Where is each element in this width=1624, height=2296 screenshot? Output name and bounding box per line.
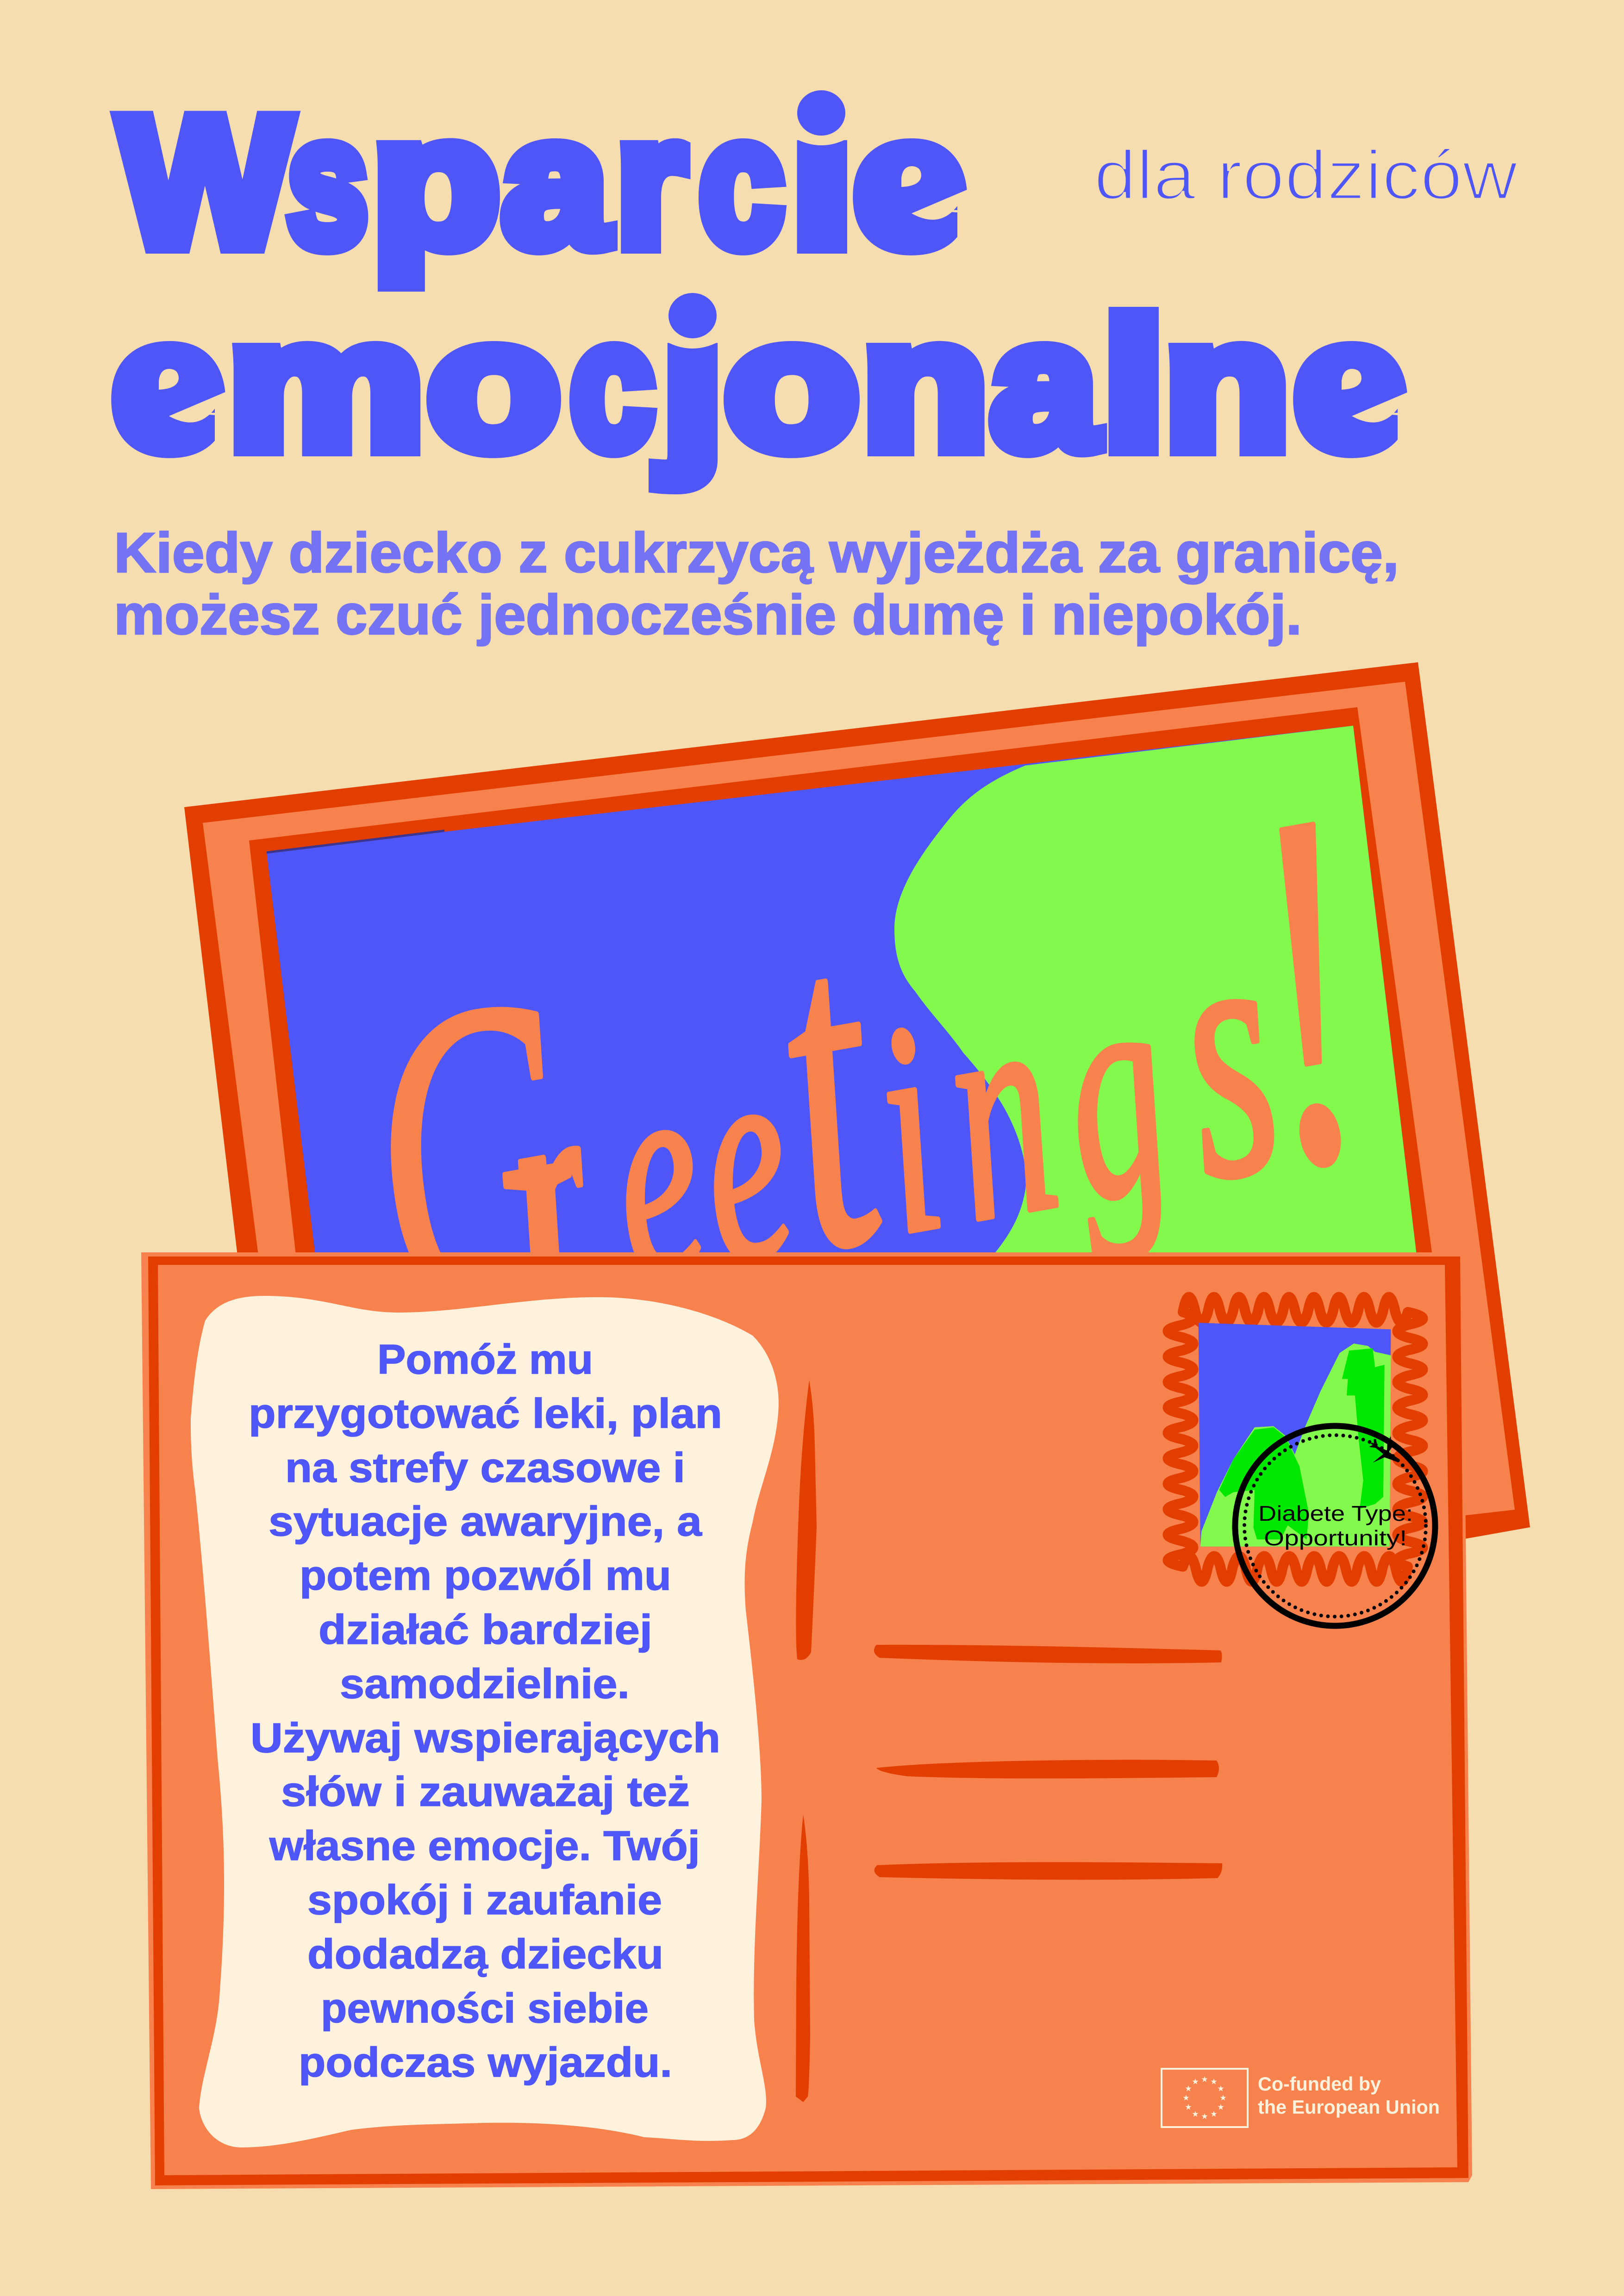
hand lettering: Greetings!: n	[923, 931, 1077, 1287]
postmark: Diabete Type: Opportunity!: Diabete Type:	[1258, 1501, 1413, 1525]
hand lettering: Greetings!: g	[1036, 911, 1191, 1267]
title: n	[862, 282, 988, 487]
title: a	[991, 282, 1099, 487]
body text: słów i zauważaj też	[281, 1769, 690, 1815]
body text: przygotować leki, plan	[249, 1391, 722, 1437]
icon: EU stars	[1183, 2076, 1226, 2119]
logo: EU co-funded: Co-funded by	[1258, 2073, 1381, 2095]
title: e	[1294, 282, 1405, 487]
subheading: dla rodziców: dla rodziców	[1094, 136, 1518, 214]
picture: sky and hill	[267, 726, 1417, 1259]
postmark: Diabete Type: Opportunity!: Opportunity!	[1264, 1526, 1407, 1550]
hand lettering: Greetings!: G	[335, 901, 613, 1414]
intro text: możesz czuć jednocześnie dumę i niepokój.	[114, 583, 1302, 646]
icon: airplane	[1369, 1436, 1399, 1463]
body text: na strefy czasowe i	[285, 1445, 685, 1491]
title: e	[112, 282, 224, 487]
address lines	[874, 1645, 1222, 1880]
body text: spokój i zaufanie	[307, 1877, 662, 1923]
title: r	[617, 80, 685, 284]
body text: pewności siebie	[321, 1985, 649, 2032]
hand lettering: Greetings!	[325, 705, 1404, 1428]
body text: działać bardziej	[319, 1607, 652, 1653]
body text: potem pozwól mu	[300, 1553, 671, 1599]
title: s	[287, 80, 368, 284]
hand lettering: Greetings!: e	[675, 991, 812, 1328]
title: l	[1103, 282, 1164, 487]
title: n	[1165, 282, 1289, 487]
body text: własne emocje. Twój	[269, 1823, 700, 1869]
hand lettering: Greetings!: !	[1204, 705, 1404, 1273]
front postcard	[141, 1252, 1472, 2189]
body text: podczas wyjazdu.	[299, 2040, 672, 2086]
title: p	[373, 80, 499, 286]
intro text	[114, 521, 1399, 646]
body text: Pomóż mu	[377, 1337, 593, 1383]
logo: EU co-funded: the European Union	[1258, 2096, 1440, 2118]
stamp border	[1168, 1297, 1423, 1582]
title	[112, 80, 1412, 488]
title: j	[659, 282, 723, 488]
back postcard	[184, 662, 1530, 1685]
postage stamp	[1168, 1297, 1423, 1582]
hand lettering: Greetings!: s	[1149, 848, 1304, 1256]
hand lettering: Greetings!: t	[740, 827, 918, 1347]
title: m	[228, 282, 424, 487]
body text: sytuacje awaryjne, a	[269, 1499, 702, 1545]
title: i	[792, 80, 853, 284]
body text: dodadzą dziecku	[307, 1931, 663, 1978]
text panel: cream blob	[191, 1296, 779, 2147]
intro text: Kiedy dziecko z cukrzycą wyjeżdża za granicę,	[114, 521, 1399, 584]
postmark: Diabete Type: Opportunity!	[1235, 1426, 1435, 1626]
hand lettering: Greetings!: e	[587, 1007, 725, 1344]
logo: EU co-funded	[1162, 2069, 1440, 2127]
hand lettering: Greetings!: i	[853, 960, 962, 1297]
title: a	[503, 80, 609, 284]
title: o	[725, 282, 858, 487]
title: o	[428, 282, 560, 487]
title: e	[854, 80, 965, 284]
postcard divider lines	[796, 1380, 817, 2102]
title: c	[700, 80, 783, 284]
title: W	[120, 80, 292, 284]
hand lettering: Greetings!: r	[487, 1026, 617, 1361]
body text: samodzielnie.	[340, 1661, 630, 1707]
body text: Używaj wspierających	[250, 1715, 720, 1761]
body text	[249, 1337, 722, 2086]
stamp picture	[1199, 1323, 1391, 1547]
title: c	[570, 282, 654, 487]
